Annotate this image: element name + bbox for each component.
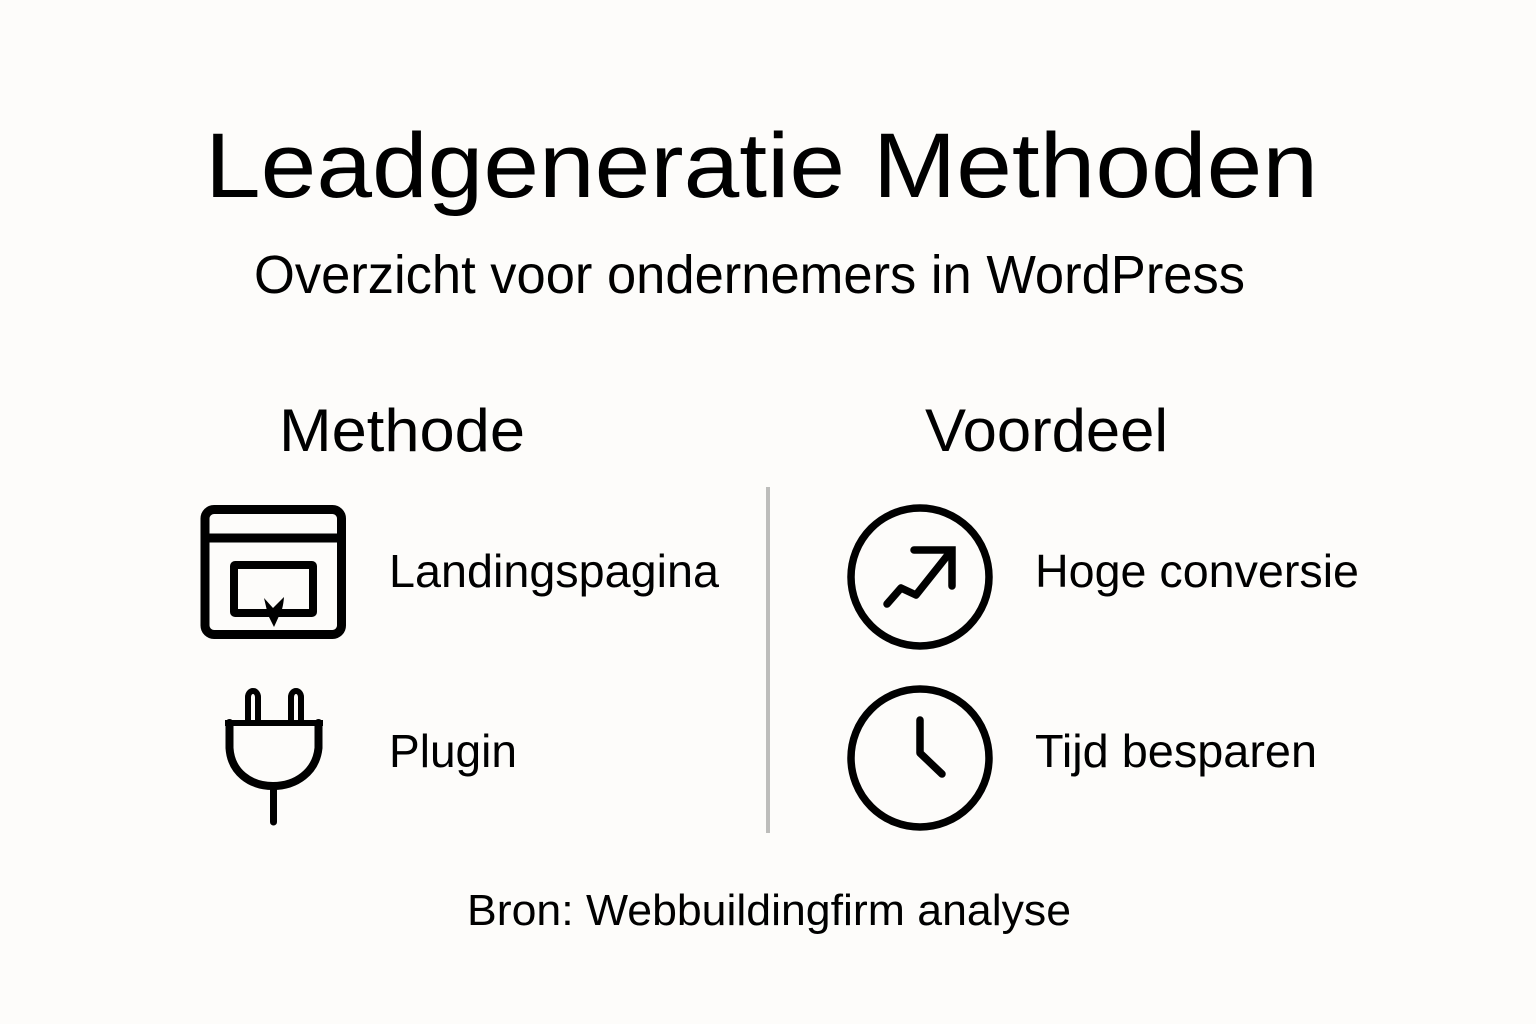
label: Landingspagina: Landingspagina [389,545,719,597]
label: Hoge conversie: Hoge conversie [1035,545,1359,597]
column heading: Methode: Methode [279,397,525,464]
icon: landing page browser window [205,510,342,634]
title: Leadgeneratie Methoden [205,115,1318,217]
icon: rising arrow in circle [851,508,989,646]
label: Tijd besparen: Tijd besparen [1035,725,1317,777]
column divider [766,487,770,833]
column heading: Voordeel: Voordeel [925,397,1168,464]
subtitle: Overzicht voor ondernemers in WordPress [254,245,1245,305]
source note: Bron: Webbuildingfirm analyse [467,886,1071,935]
label: Plugin: Plugin [389,725,517,777]
icon: plug [225,691,323,822]
icon: clock [851,689,989,827]
